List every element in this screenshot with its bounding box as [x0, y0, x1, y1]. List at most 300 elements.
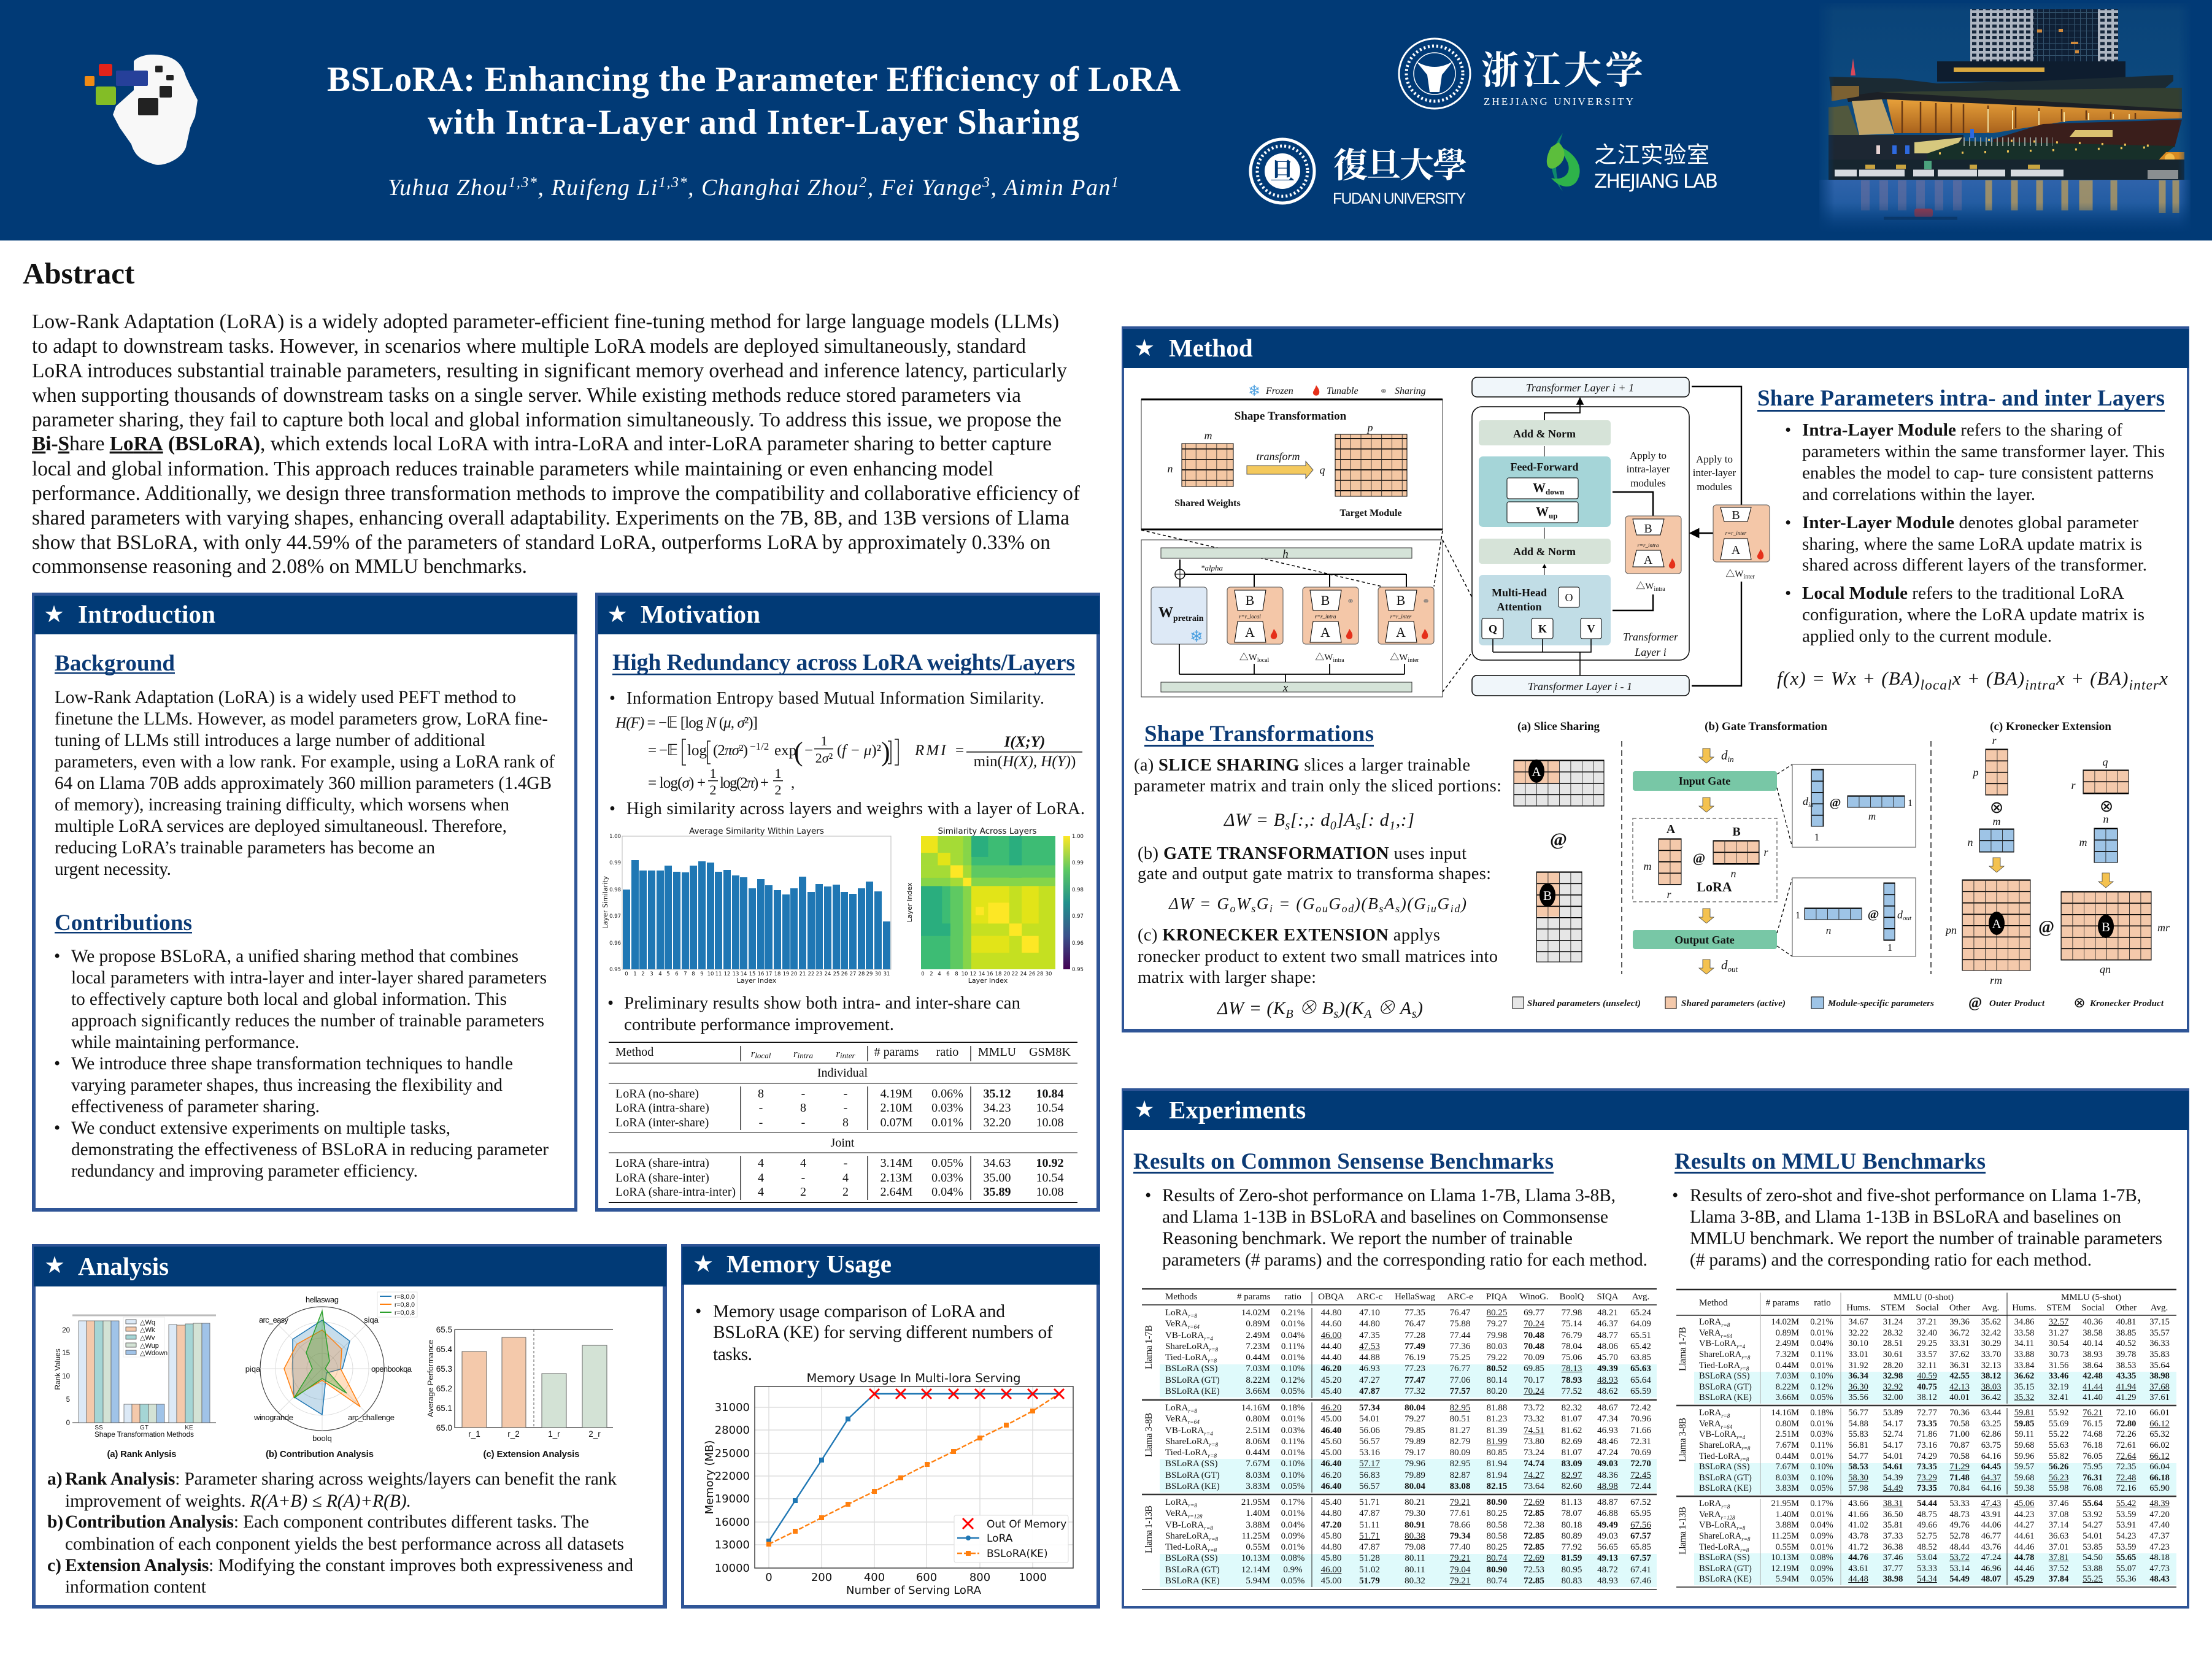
table: MMLU benchmarks: 3.83M: [1776, 1483, 1799, 1493]
text block: abstract body: parameter sharing, they fail to capture both local and global information simultaneously. To address this issue, we propose the: [32, 409, 1062, 431]
line chart: memory usage in multi-LoRA serving: 1000: [1019, 1571, 1047, 1584]
table: MMLU benchmarks: VeRAr=64: [1699, 1328, 1732, 1339]
table: MMLU benchmarks: Other: [1949, 1303, 1970, 1313]
table: common sense benchmarks: 80.04: [1405, 1403, 1425, 1413]
table: MMLU benchmarks: 33.46: [2049, 1371, 2068, 1381]
table: common sense benchmarks: HellaSwag: [1395, 1292, 1435, 1302]
bar chart: average similarity within layers: 15: [749, 971, 755, 977]
diagram: shape transformation: n: [1167, 463, 1173, 475]
authors: , Ruifeng Li: [538, 175, 657, 201]
table: preliminary results: -: [801, 1171, 805, 1185]
radar chart: contribution analysis: winogrande: [253, 1413, 293, 1422]
table: MMLU benchmarks: 54.34: [1917, 1574, 1937, 1584]
table: common sense benchmarks: 3.83M: [1246, 1482, 1270, 1491]
table: MMLU benchmarks: 0.10%: [1810, 1371, 1833, 1381]
table: common sense benchmarks: 81.23: [1487, 1414, 1507, 1424]
legend: frozen tunable sharing: [1248, 382, 1426, 399]
text block: abstract body: when supporting thousands of downstream tasks on a single server. While existing methods reduce stored parameters via: [32, 384, 1021, 407]
table: common sense benchmarks: 44.40: [1321, 1342, 1341, 1351]
text block: abstract body: shared parameters with varying shapes, enhancing overall adaptability. Experiments on the 7B, 8B, and 13B versions of Llama: [32, 507, 1069, 529]
table: MMLU benchmarks: 54.50: [2083, 1553, 2103, 1563]
table: common sense benchmarks: 76.77: [1450, 1364, 1470, 1374]
formula: f(x): x + (BA): [2056, 667, 2128, 689]
table: preliminary results: 0.03%: [931, 1101, 963, 1115]
table: common sense benchmarks: 67.41: [1630, 1565, 1651, 1575]
text block: background: tuning of LLMs still introduces a large number of additional: [55, 731, 485, 750]
table: common sense benchmarks: VB-LoRAr=4: [1165, 1331, 1213, 1342]
captions: analysis charts: [107, 1449, 579, 1459]
diagram: kronecker extension: [1944, 734, 2170, 986]
radar chart: contribution analysis: siqa: [364, 1315, 379, 1324]
table: common sense benchmarks: 44.80: [1321, 1509, 1341, 1518]
text block: module definitions: [1785, 420, 2165, 646]
bar chart: average similarity within layers: 16: [758, 971, 764, 977]
radar chart: contribution analysis: arc_easy: [259, 1315, 288, 1324]
table: common sense benchmarks: 74.51: [1524, 1426, 1544, 1436]
text block: shape transformations: ): [1460, 894, 1466, 913]
table: common sense benchmarks: 72.38: [1524, 1520, 1544, 1530]
table: common sense benchmarks: 51.71: [1359, 1497, 1380, 1507]
table: MMLU benchmarks: 0.12%: [1810, 1382, 1833, 1392]
table: common sense benchmarks: 81.88: [1487, 1403, 1507, 1413]
table: preliminary results: LoRA (inter-share): [615, 1116, 709, 1129]
table: MMLU benchmarks: 38.85: [2116, 1328, 2136, 1338]
text block: module definitions: •: [1785, 420, 1791, 440]
table: MMLU benchmarks: 58.53: [1848, 1462, 1868, 1472]
formula: f(x): inter: [2129, 677, 2159, 693]
table: common sense benchmarks: 2.51M: [1246, 1426, 1270, 1436]
table: MMLU benchmarks: 30.73: [2049, 1350, 2068, 1359]
table: MMLU benchmarks: BSLoRA (SS): [1699, 1371, 1750, 1381]
table: MMLU benchmarks: 37.77: [1883, 1564, 1903, 1574]
table: preliminary results: 2: [842, 1185, 849, 1199]
table: common sense benchmarks: 0.04%: [1281, 1331, 1304, 1340]
text block: shape transformations: s: [1412, 1007, 1417, 1021]
table: common sense benchmarks: 79.08: [1405, 1542, 1425, 1552]
diagram: gate transformation: out: [1903, 915, 1912, 922]
table: MMLU benchmarks: 53.14: [1949, 1564, 1970, 1574]
diagram: transformer layer: intra-layer: [1627, 463, 1670, 475]
diagram: transformer layer: Transformer Layer i + 1: [1526, 382, 1634, 394]
text block: common sense description: •: [1145, 1186, 1151, 1205]
table: preliminary results: 3.14M: [881, 1156, 913, 1170]
text block: background: finetune the LLMs. However, as model parameters grow, LoRA fine-: [55, 709, 548, 729]
table: MMLU benchmarks: 71.29: [1949, 1462, 1970, 1472]
table: MMLU benchmarks: 38.93: [2083, 1350, 2103, 1359]
table: common sense benchmarks: 80.09: [1450, 1448, 1470, 1458]
line chart: memory usage in multi-LoRA serving: 600: [916, 1571, 937, 1584]
table: MMLU benchmarks: 33.01: [1848, 1350, 1868, 1359]
table: MMLU benchmarks: 48.39: [2149, 1499, 2170, 1509]
heading: motivation: ★: [607, 601, 628, 628]
text block: shape transformations: )(G: [1400, 894, 1426, 913]
table: MMLU benchmarks: 43.91: [1981, 1510, 2001, 1520]
heatmap: similarity across layers: 30: [1046, 971, 1052, 977]
diagram: kronecker extension: r: [2071, 779, 2076, 791]
table: MMLU benchmarks: BSLoRA (GT): [1699, 1382, 1752, 1392]
table: preliminary results: 34.23: [983, 1101, 1011, 1115]
table: preliminary results: ratio: [936, 1045, 958, 1059]
diagram: transformer layer: Q: [1489, 623, 1497, 635]
table: common sense benchmarks: 81.59: [1562, 1553, 1582, 1563]
diagram: transformer layer: intra: [1654, 586, 1665, 593]
table: MMLU benchmarks: 71.86: [1917, 1429, 1937, 1439]
table: MMLU benchmarks: 58.30: [1848, 1473, 1868, 1483]
table: common sense benchmarks: 46.40: [1321, 1459, 1341, 1469]
diagram: shape transformation: transform: [1256, 450, 1300, 463]
bar chart: average similarity within layers: 18: [774, 971, 780, 977]
table: MMLU benchmarks: 0.05%: [1810, 1574, 1833, 1584]
text block: contributions: We propose BSLoRA, a unified sharing method that combines: [71, 947, 518, 966]
line chart: memory usage in multi-LoRA serving: 28000: [715, 1424, 750, 1437]
table: MMLU benchmarks: 47.24: [1981, 1553, 2001, 1563]
table: common sense benchmarks: 80.91: [1405, 1520, 1425, 1530]
table: MMLU benchmarks: 76.21: [2083, 1408, 2103, 1418]
table: MMLU benchmarks: VB-LoRAr=4: [1699, 1429, 1745, 1440]
text block: shape transformations: W: [1236, 894, 1252, 913]
module: inter-layer LoRA: A: [1732, 544, 1741, 557]
heading: contributions: Contributions: [55, 910, 192, 936]
bar chart: extension analysis: r_1: [468, 1429, 480, 1439]
text block: abstract body: local and global information. This approach reduces trainable parameters while maintaining or even enhancing model: [32, 458, 993, 480]
table: common sense benchmarks: Tied-LoRAr=8: [1165, 1448, 1217, 1459]
text block: abstract body: show that BSLoRA, with only 44.59% of the parameters of standard LoRA, outperforms LoRA by approximately 0.33% on: [32, 531, 1050, 554]
line chart: memory usage in multi-LoRA serving: 200: [811, 1571, 832, 1584]
table: common sense benchmarks: 81.27: [1450, 1426, 1470, 1436]
bullet: memory comparison: Memory usage comparison of LoRA and: [713, 1302, 1005, 1321]
table: MMLU benchmarks: 32.13: [1981, 1361, 2001, 1371]
table: preliminary results: -: [759, 1101, 763, 1115]
bar chart: average similarity within layers: 0.99: [609, 860, 621, 866]
table: MMLU benchmarks: 66.01: [2149, 1408, 2170, 1418]
table: common sense benchmarks: 48.72: [1597, 1565, 1618, 1575]
table: common sense benchmarks: 81.39: [1487, 1426, 1507, 1436]
table: MMLU benchmarks: 59.85: [2014, 1419, 2034, 1429]
text block: abstract body: Low-Rank Adaptation (LoRA) is a widely adopted parameter-efficient fine-tuning method for large language models (LLMs): [32, 310, 1059, 333]
diagram: transformer layer: Attention: [1497, 601, 1541, 613]
table: common sense benchmarks: 3.66M: [1246, 1386, 1270, 1396]
table: common sense benchmarks: 77.06: [1450, 1375, 1470, 1385]
text block: MMLU description: Llama 3-8B, and Llama 1-13B in BSLoRA and baselines on: [1690, 1207, 2121, 1227]
table: MMLU benchmarks: 72.77: [1917, 1408, 1937, 1418]
line chart: memory usage in multi-LoRA serving: LoRA: [987, 1532, 1013, 1545]
text block: module definitions: •: [1785, 513, 1791, 532]
text block: shape transformations: G: [1257, 894, 1268, 913]
text block: contributions: varying parameter shapes, thus increasing the flexibility and: [71, 1075, 503, 1095]
table: preliminary results: LoRA (no-share): [615, 1087, 699, 1101]
text block: shape transformations: ΔW = B: [1224, 810, 1285, 830]
table: common sense benchmarks: 74.27: [1524, 1471, 1544, 1480]
table: MMLU benchmarks: Tied-LoRAr=8: [1699, 1542, 1749, 1553]
table: common sense benchmarks: 75.25: [1450, 1353, 1470, 1363]
table: MMLU benchmarks: 53.72: [1949, 1553, 1970, 1563]
legend: shape transformations: Outer Product: [1989, 999, 2045, 1009]
table: common sense benchmarks: 46.20: [1321, 1471, 1341, 1480]
table: MMLU benchmarks: 54.61: [1883, 1462, 1903, 1472]
bullet: memory comparison: BSLoRA (KE) for serving different numbers of: [713, 1323, 1053, 1342]
table: MMLU benchmarks: 21.95M: [1771, 1499, 1799, 1509]
table: common sense benchmarks: 8.03M: [1246, 1471, 1270, 1480]
table: MMLU benchmarks: 37.21: [1917, 1317, 1937, 1327]
bar chart: average similarity within layers: 7: [684, 971, 687, 977]
diagram: transformer layer: Transformer Layer i - 1: [1528, 680, 1632, 693]
diagram: transformer layer: O: [1565, 591, 1573, 604]
formula: entropy and RMI: (2πσ²): [713, 742, 748, 759]
panel: method: [1122, 326, 2189, 1032]
table: MMLU benchmarks: 32.40: [1917, 1328, 1937, 1338]
legend: frozen tunable sharing: Sharing: [1395, 386, 1426, 396]
table: MMLU benchmarks: 32.19: [2049, 1382, 2068, 1392]
table: MMLU benchmarks: 0.17%: [1810, 1499, 1833, 1509]
diagram: kronecker extension: ⊗: [1990, 798, 2003, 817]
text block: shape transformations: (b) GATE TRANSFORMATION uses input: [1138, 844, 1466, 863]
text block: shape transformations: [:,: d: [1290, 810, 1330, 830]
table: MMLU benchmarks: 0.44M: [1776, 1451, 1799, 1461]
table: MMLU benchmarks: 34.11: [2014, 1339, 2034, 1348]
bar chart: extension analysis: 65.2: [436, 1384, 452, 1393]
table: common sense benchmarks: 77.49: [1405, 1342, 1425, 1351]
bar chart: average similarity within layers: 20: [791, 971, 797, 977]
formula: entropy and RMI: 2: [774, 782, 782, 798]
module: intra LoRA: A: [1320, 625, 1330, 640]
table: common sense benchmarks: 67.46: [1630, 1576, 1651, 1586]
table: common sense benchmarks: 80.25: [1487, 1509, 1507, 1518]
table: MMLU benchmarks: 0.11%: [1811, 1440, 1833, 1450]
table: MMLU benchmarks: ShareLoRAr=8: [1699, 1531, 1750, 1542]
table: MMLU benchmarks: 28.51: [1883, 1339, 1903, 1348]
module: inter LoRA: [1378, 587, 1434, 644]
bar chart: rank analysis: 15: [62, 1350, 70, 1357]
table: MMLU benchmarks: 76.15: [2083, 1419, 2103, 1429]
table: common sense benchmarks: 75.88: [1450, 1319, 1470, 1329]
heatmap: similarity across layers: Layer Index: [906, 882, 914, 922]
table: preliminary results: LoRA (share-inter): [615, 1171, 709, 1185]
table: common sense benchmarks: 46.20: [1321, 1364, 1341, 1374]
text block: shape transformations: (c) KRONECKER EXTENSION applys: [1138, 926, 1440, 945]
table: MMLU benchmarks: 41.40: [2083, 1393, 2103, 1402]
table: MMLU benchmarks: 73.35: [1917, 1419, 1937, 1429]
table: preliminary results: 10.54: [1036, 1101, 1064, 1115]
table: MMLU benchmarks: 36.72: [1949, 1328, 1970, 1338]
bar chart: rank analysis: △Wup: [140, 1342, 159, 1350]
table: common sense benchmarks: 49.03: [1597, 1459, 1618, 1469]
table: MMLU benchmarks: 64.45: [1981, 1462, 2001, 1472]
table: MMLU benchmarks: 0.05%: [1810, 1483, 1833, 1493]
table: common sense benchmarks: 82.60: [1562, 1482, 1582, 1491]
table: MMLU benchmarks: 45.29: [2014, 1574, 2034, 1584]
text block: shape transformations: G: [1328, 894, 1341, 913]
text block: common sense description: parameters (# params) and the corresponding ratio for each method.: [1162, 1250, 1647, 1270]
table: common sense benchmarks: 47.10: [1359, 1308, 1380, 1318]
table: preliminary results: 32.20: [983, 1116, 1011, 1129]
table: common sense benchmarks: 48.46: [1597, 1437, 1618, 1447]
table: MMLU benchmarks: 7.67M: [1776, 1440, 1799, 1450]
table: common sense benchmarks: 48.77: [1597, 1331, 1618, 1340]
text block: shape transformations: )(K: [1338, 998, 1365, 1018]
text block: abstract body: commonsense reasoning and 2.08% on MMLU benchmarks.: [32, 555, 527, 578]
text block: MMLU description: (# params) and the corresponding ratio for each method.: [1690, 1250, 2092, 1270]
text block: common sense description: [1145, 1186, 1647, 1270]
table: MMLU benchmarks: 43.66: [1848, 1499, 1868, 1509]
table: MMLU benchmarks: 10.13M: [1771, 1553, 1799, 1563]
table: common sense benchmarks: 56.06: [1359, 1426, 1380, 1436]
table: MMLU benchmarks: 0.01%: [1810, 1419, 1833, 1429]
bar chart: rank analysis: △Wdown: [140, 1350, 168, 1357]
table: common sense benchmarks: 70.96: [1630, 1414, 1651, 1424]
text block: abstract body: to adapt to downstream tasks. However, in scenarios where multiple LoRA models are deployed simultaneously, standard: [32, 335, 1026, 358]
title: [327, 60, 1181, 142]
legend: shape transformations: Shared parameters (active): [1681, 999, 1786, 1009]
table: common sense benchmarks: Tied-LoRAr=8: [1165, 1353, 1217, 1364]
text block: contributions: local parameters with intra-layer and inter-layer shared parameters: [71, 968, 547, 988]
table: common sense benchmarks: 80.25: [1487, 1542, 1507, 1552]
table: common sense benchmarks: 45.00: [1321, 1414, 1341, 1424]
radar chart: contribution analysis: boolq: [312, 1434, 332, 1443]
table: MMLU benchmarks: 56.23: [2049, 1473, 2068, 1483]
table: MMLU benchmarks: 2.49M: [1776, 1339, 1799, 1348]
radar chart: contribution analysis: hellaswag: [306, 1295, 339, 1304]
table: common sense benchmarks: 0.10%: [1281, 1364, 1304, 1374]
table: MMLU benchmarks: 46.96: [1981, 1564, 2001, 1574]
diagram: kronecker extension: q: [2102, 756, 2108, 768]
table: MMLU benchmarks: 32.00: [1883, 1393, 1903, 1402]
text block: abstract body: [32, 310, 1081, 578]
table: preliminary results: 8: [842, 1116, 849, 1129]
heatmap: similarity across layers: 16: [987, 971, 993, 977]
bar chart: extension analysis: 1_r: [548, 1429, 560, 1439]
legend: frozen tunable sharing: Frozen: [1265, 386, 1293, 396]
table: MMLU benchmarks: 14.16M: [1771, 1408, 1799, 1418]
table: common sense benchmarks: PIQA: [1486, 1292, 1508, 1302]
table: MMLU benchmarks: 72.35: [2116, 1462, 2136, 1472]
diagram: shape transformation: p: [1366, 421, 1373, 434]
legend: shape transformations: ⊗: [2073, 995, 2086, 1011]
table: common sense benchmarks: 46.00: [1321, 1565, 1341, 1575]
table: common sense benchmarks: 0.01%: [1281, 1509, 1304, 1518]
table: MMLU benchmarks: 37.81: [2049, 1553, 2068, 1563]
text block: contributions: effectiveness of parameter sharing.: [71, 1097, 320, 1117]
table: MMLU benchmarks: 36.33: [2149, 1339, 2170, 1348]
text block: module definitions: shared across different layers of the transformer.: [1802, 555, 2147, 575]
radar chart: contribution analysis: arc_challenge: [348, 1413, 395, 1422]
line chart: memory usage in multi-LoRA serving: Memory (MB): [703, 1440, 716, 1514]
module: local LoRA: A: [1245, 625, 1255, 640]
table: common sense benchmarks: 72.69: [1524, 1497, 1544, 1507]
bar chart: average similarity within layers: Layer Index: [737, 977, 777, 985]
text block: shape transformations: gate and output gate matrix to transforma shapes:: [1138, 864, 1491, 883]
table: MMLU benchmarks: 48.73: [1949, 1510, 1970, 1520]
text block: module definitions: Local Module refers to the traditional LoRA: [1802, 583, 2124, 603]
logo: Zhejiang University: 浙江大学: [1481, 40, 1643, 94]
text block: MMLU description: [1672, 1186, 2162, 1270]
table: preliminary results: 0.03%: [931, 1171, 963, 1185]
text block: shape transformations: ]A: [1336, 810, 1356, 830]
table: common sense benchmarks: 80.14: [1487, 1375, 1507, 1385]
table: MMLU benchmarks: 35.62: [1981, 1317, 2001, 1327]
table: MMLU benchmarks: 37.15: [2149, 1317, 2170, 1327]
bar chart: average similarity within layers: 4: [658, 971, 662, 977]
table: MMLU benchmarks: [1676, 1290, 2176, 1587]
table: MMLU benchmarks: 53.88: [2083, 1564, 2103, 1574]
table: common sense benchmarks: 72.44: [1630, 1482, 1651, 1491]
table: common sense benchmarks: 79.30: [1405, 1509, 1425, 1518]
diagram: gate transformation: @: [1868, 908, 1879, 921]
table: MMLU benchmarks: 44.46: [2014, 1564, 2034, 1574]
table: common sense benchmarks: 70.69: [1630, 1448, 1651, 1458]
text block: shape transformations: B: [1285, 1007, 1293, 1021]
text block: analysis findings: improvement of weights. R(A+B) ≤ R(A)+R(B).: [65, 1491, 411, 1511]
table: common sense benchmarks: Avg.: [1632, 1292, 1649, 1302]
radar chart: contribution analysis: r=0,0,8: [395, 1309, 415, 1317]
bullet: memory comparison: tasks.: [713, 1345, 752, 1364]
table: common sense benchmarks: 47.35: [1359, 1331, 1380, 1340]
table: common sense benchmarks: 0.01%: [1281, 1414, 1304, 1424]
table: MMLU benchmarks: 53.59: [2116, 1510, 2136, 1520]
authors: Yuhua Zhou: [388, 175, 507, 201]
table: MMLU benchmarks: 35.64: [2149, 1361, 2170, 1371]
table: MMLU benchmarks: 38.12: [1981, 1371, 2001, 1381]
formula: f(x): local: [1921, 677, 1952, 693]
table: common sense benchmarks: 80.58: [1487, 1531, 1507, 1541]
table: common sense benchmarks: BSLoRA (GT): [1165, 1375, 1220, 1385]
table: MMLU benchmarks: 0.44M: [1776, 1361, 1799, 1371]
table: MMLU benchmarks: BSLoRA (SS): [1699, 1462, 1750, 1472]
table: MMLU benchmarks: 54.27: [2083, 1520, 2103, 1530]
table: MMLU benchmarks: 36.50: [1883, 1510, 1903, 1520]
table: MMLU benchmarks: 44.76: [1848, 1553, 1868, 1563]
table: MMLU benchmarks: BSLoRA (KE): [1699, 1393, 1752, 1402]
heading: abstract: Abstract: [23, 256, 135, 290]
table: common sense benchmarks: 77.35: [1405, 1308, 1425, 1318]
table: common sense benchmarks: 69.85: [1524, 1364, 1544, 1374]
table: MMLU benchmarks: 55.64: [2083, 1499, 2103, 1509]
table: MMLU benchmarks: 47.23: [2149, 1542, 2170, 1552]
bullet: preliminary results: •: [607, 993, 614, 1013]
table: MMLU benchmarks: 54.17: [1883, 1419, 1903, 1429]
diagram: gate transformation: m: [1868, 810, 1876, 822]
diagram: gate transformation: Output Gate: [1674, 934, 1735, 946]
module: intra LoRA: B: [1321, 593, 1330, 608]
table: MMLU benchmarks: 64.16: [1981, 1451, 2001, 1461]
table: common sense benchmarks: 45.40: [1321, 1497, 1341, 1507]
line chart: memory usage in multi-LoRA serving: 800: [969, 1571, 990, 1584]
table: common sense benchmarks: 0.11%: [1281, 1342, 1304, 1351]
title: BSLoRA: Enhancing the Parameter Efficiency of LoRA: [327, 60, 1181, 99]
table: MMLU benchmarks: 7.67M: [1776, 1462, 1799, 1472]
table: MMLU benchmarks: 59.96: [2014, 1451, 2034, 1461]
table: MMLU benchmarks: 55.82: [2049, 1451, 2068, 1461]
table: MMLU benchmarks: 49.76: [1949, 1520, 1970, 1530]
diagram: transformer layer: modules: [1630, 477, 1666, 489]
text block: contributions: •: [54, 947, 60, 966]
formula: entropy and RMI: ,: [791, 775, 795, 791]
diagram: gate transformation: d: [1721, 748, 1728, 763]
table: common sense benchmarks: 79.21: [1450, 1553, 1470, 1563]
table: common sense benchmarks: BSLoRA (SS): [1165, 1553, 1217, 1563]
module: intra-layer LoRA: r=r_intra: [1637, 542, 1659, 548]
bar chart: average similarity within layers: 24: [825, 971, 831, 977]
bar chart: rank analysis: 20: [62, 1327, 70, 1334]
heading: MMLU benchmarks: Results on MMLU Benchmarks: [1674, 1149, 1986, 1174]
formula: f(x): x + (BA): [1952, 667, 2024, 689]
diagram: gate transformation: Input Gate: [1679, 775, 1730, 787]
heading: experiments: ★: [1134, 1096, 1155, 1123]
diagram: LoRA modules with shared parts: △W: [1315, 653, 1333, 663]
diagram: gate transformation: r: [1763, 846, 1768, 858]
table: MMLU benchmarks: 73.16: [1917, 1440, 1937, 1450]
text block: contributions: We introduce three shape transformation techniques to handle: [71, 1054, 513, 1074]
table: MMLU benchmarks: 7.32M: [1776, 1350, 1799, 1359]
